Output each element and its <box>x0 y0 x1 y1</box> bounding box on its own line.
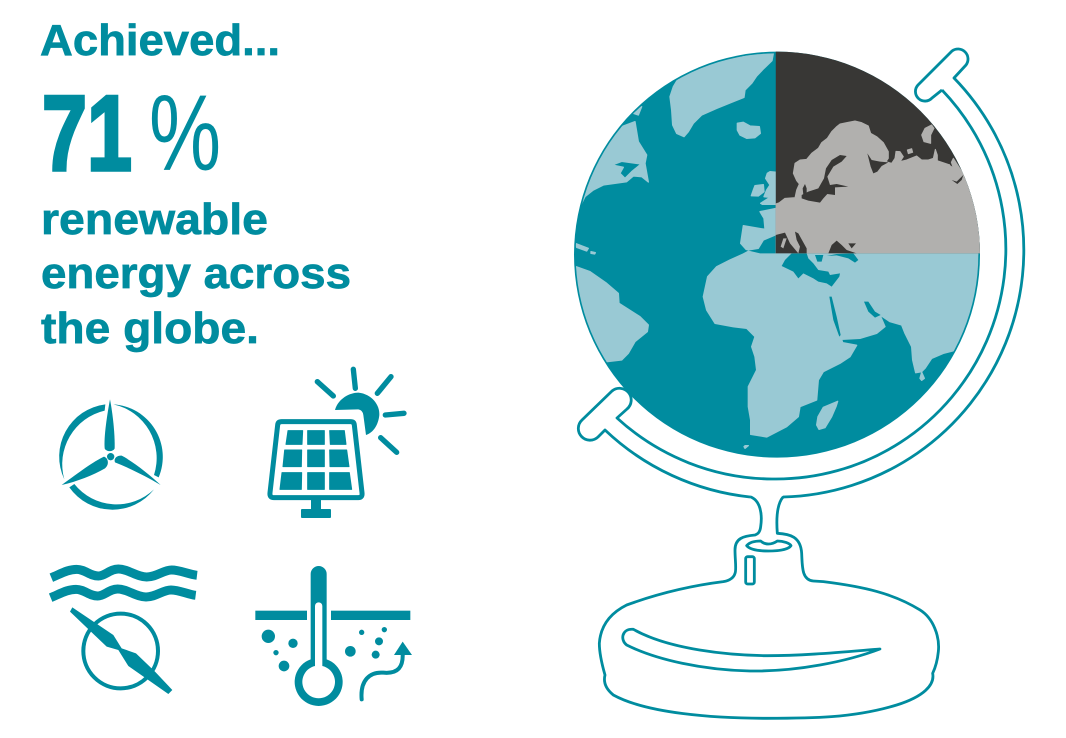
seas over land <box>782 253 881 337</box>
Madagascar <box>817 401 838 429</box>
base highlight <box>623 629 880 671</box>
globe stand <box>578 49 1024 718</box>
Adriatic and Black Sea south <box>815 253 858 263</box>
Black Sea <box>828 241 857 253</box>
Eurasia landmass <box>776 121 987 257</box>
Adriatic Sea <box>795 232 807 253</box>
Iceland <box>737 122 760 138</box>
icon: wind turbine <box>59 399 163 510</box>
stand: top cap and outer arc <box>783 49 1024 497</box>
text block: headline <box>40 16 351 353</box>
Newfoundland fragment and Caribbean <box>575 107 642 254</box>
big number: 71: 71 <box>42 73 132 193</box>
South America <box>576 266 649 362</box>
Mediterranean Sea <box>782 253 840 287</box>
Novaya Zemlya <box>922 125 934 143</box>
base outline <box>599 497 939 718</box>
Sri Lanka and small islands <box>744 372 924 448</box>
Corsica and Sardinia <box>781 238 787 248</box>
icon: solar panel and sun <box>270 369 404 518</box>
quadrant ocean: dark <box>776 50 982 253</box>
Red Sea <box>829 297 841 337</box>
percent sign: % <box>149 72 221 193</box>
Persian Gulf <box>864 302 881 318</box>
text: the globe: the globe. <box>41 304 259 353</box>
globe <box>557 50 987 458</box>
Kolguev island <box>907 149 913 154</box>
land: grey <box>776 121 987 257</box>
stand: inner arc and left cap <box>578 90 1006 497</box>
Kattegat and White Sea <box>803 153 963 195</box>
text: renewable: renewable <box>41 195 268 244</box>
stand: base and neck <box>599 497 939 718</box>
Tyrrhenian Sea <box>776 233 798 253</box>
icon: tidal turbine under waves <box>51 569 197 694</box>
France and Iberia <box>741 208 777 250</box>
neck collar <box>747 541 791 551</box>
North America <box>582 121 649 204</box>
Africa and Asia <box>703 251 983 437</box>
heading: Achieved: Achieved... <box>40 16 280 65</box>
dark seas <box>776 153 963 253</box>
small slot <box>746 557 754 584</box>
land masses: light <box>557 53 983 448</box>
icons: renewable energy sources <box>51 369 412 706</box>
icon: geothermal <box>255 566 412 706</box>
British Isles <box>751 172 777 204</box>
Greenland <box>670 53 773 137</box>
Baltic Sea <box>802 155 848 203</box>
Europe quadrant <box>776 50 987 257</box>
text: energy across: energy across <box>41 249 351 298</box>
globe ocean disc <box>574 52 980 458</box>
